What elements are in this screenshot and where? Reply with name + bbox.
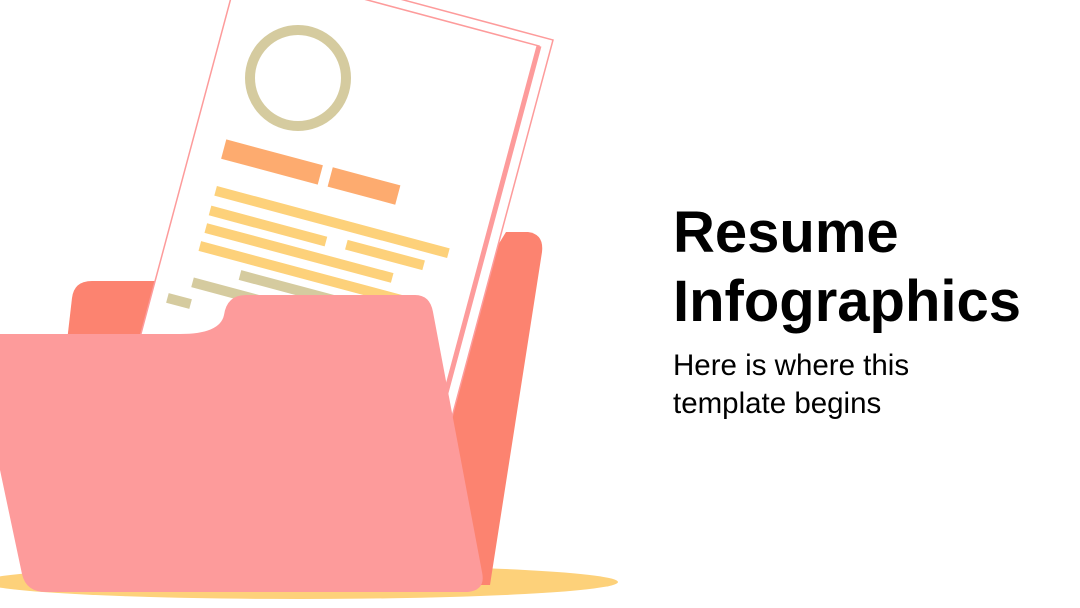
- subtitle: [673, 349, 909, 420]
- orange header bars: [221, 139, 400, 205]
- yellow text lines: [199, 186, 450, 309]
- shadow ellipse: [0, 565, 618, 599]
- photo circle: [250, 30, 346, 126]
- title: Infographics: [673, 269, 1021, 334]
- title: Resume: [673, 200, 899, 265]
- back folder: [66, 232, 542, 585]
- front page: [131, 0, 539, 452]
- back page: [145, 0, 553, 446]
- title: [673, 200, 1021, 334]
- tan text lines: [166, 270, 353, 310]
- front folder: [0, 295, 483, 592]
- subtitle: Here is where this: [673, 349, 909, 382]
- subtitle: template begins: [673, 387, 881, 420]
- resume pages: [131, 0, 553, 452]
